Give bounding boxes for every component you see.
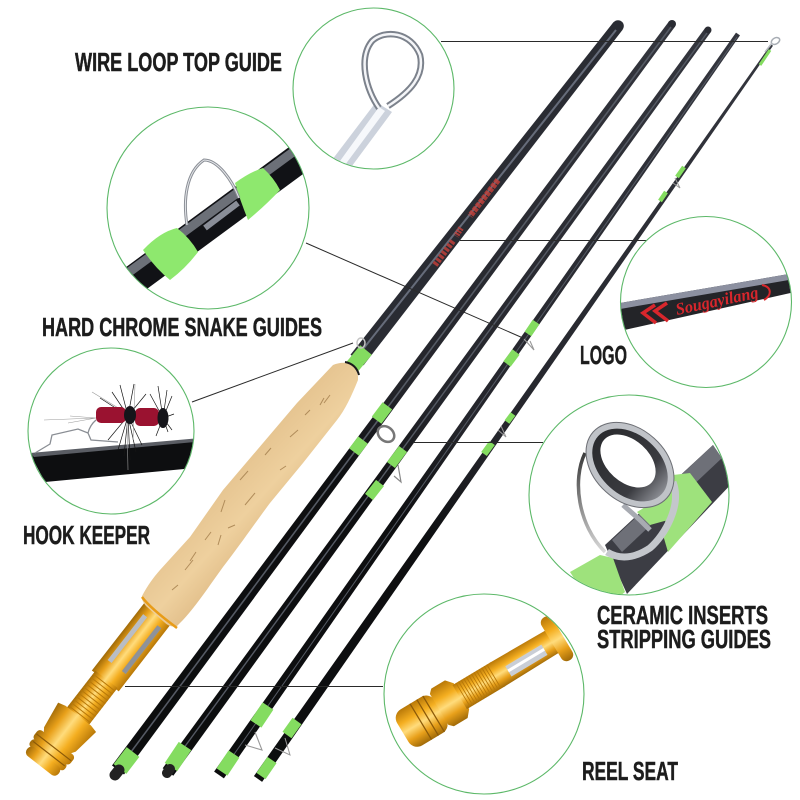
guide frame: [578, 453, 605, 552]
red logo text: [643, 283, 770, 323]
butt section with cork handle and reel seat: [21, 20, 624, 780]
panel: hard chrome snake guides: [106, 107, 309, 309]
rod section 4: [214, 33, 740, 778]
panel: reel seat: [384, 594, 584, 794]
label: ceramic inserts stripping guides: [597, 600, 771, 654]
rod blank: [605, 445, 735, 594]
panel: ceramic inserts stripping guides: [529, 395, 735, 600]
panel: logo: [620, 216, 795, 388]
leader lines: [125, 42, 768, 686]
rod section 3: [163, 26, 711, 776]
logo on blank: [435, 180, 498, 265]
label: wire loop top guide: WIRE LOOP TOP GUIDE: [75, 47, 282, 77]
label: reel seat: REEL SEAT: [582, 756, 678, 786]
rod tip section 5: [254, 36, 781, 782]
panel: hook keeper: [28, 348, 195, 514]
green wraps: [663, 473, 712, 552]
ceramic ring: [586, 422, 674, 508]
panel: wire loop top guide: [293, 8, 454, 170]
hook keeper wrap: [352, 338, 366, 367]
rod section 2: [112, 20, 676, 775]
label: logo: LOGO: [580, 340, 627, 370]
red logo text: Sougayilang: [674, 283, 760, 319]
fly bristles: [100, 384, 174, 450]
label: hard chrome snake guides: HARD CHROME SNAKE GUIDES: [42, 312, 322, 342]
reel seat: [21, 598, 177, 780]
label: hook keeper: HOOK KEEPER: [23, 520, 150, 550]
blank: [350, 22, 623, 365]
cork grip: [142, 362, 359, 628]
